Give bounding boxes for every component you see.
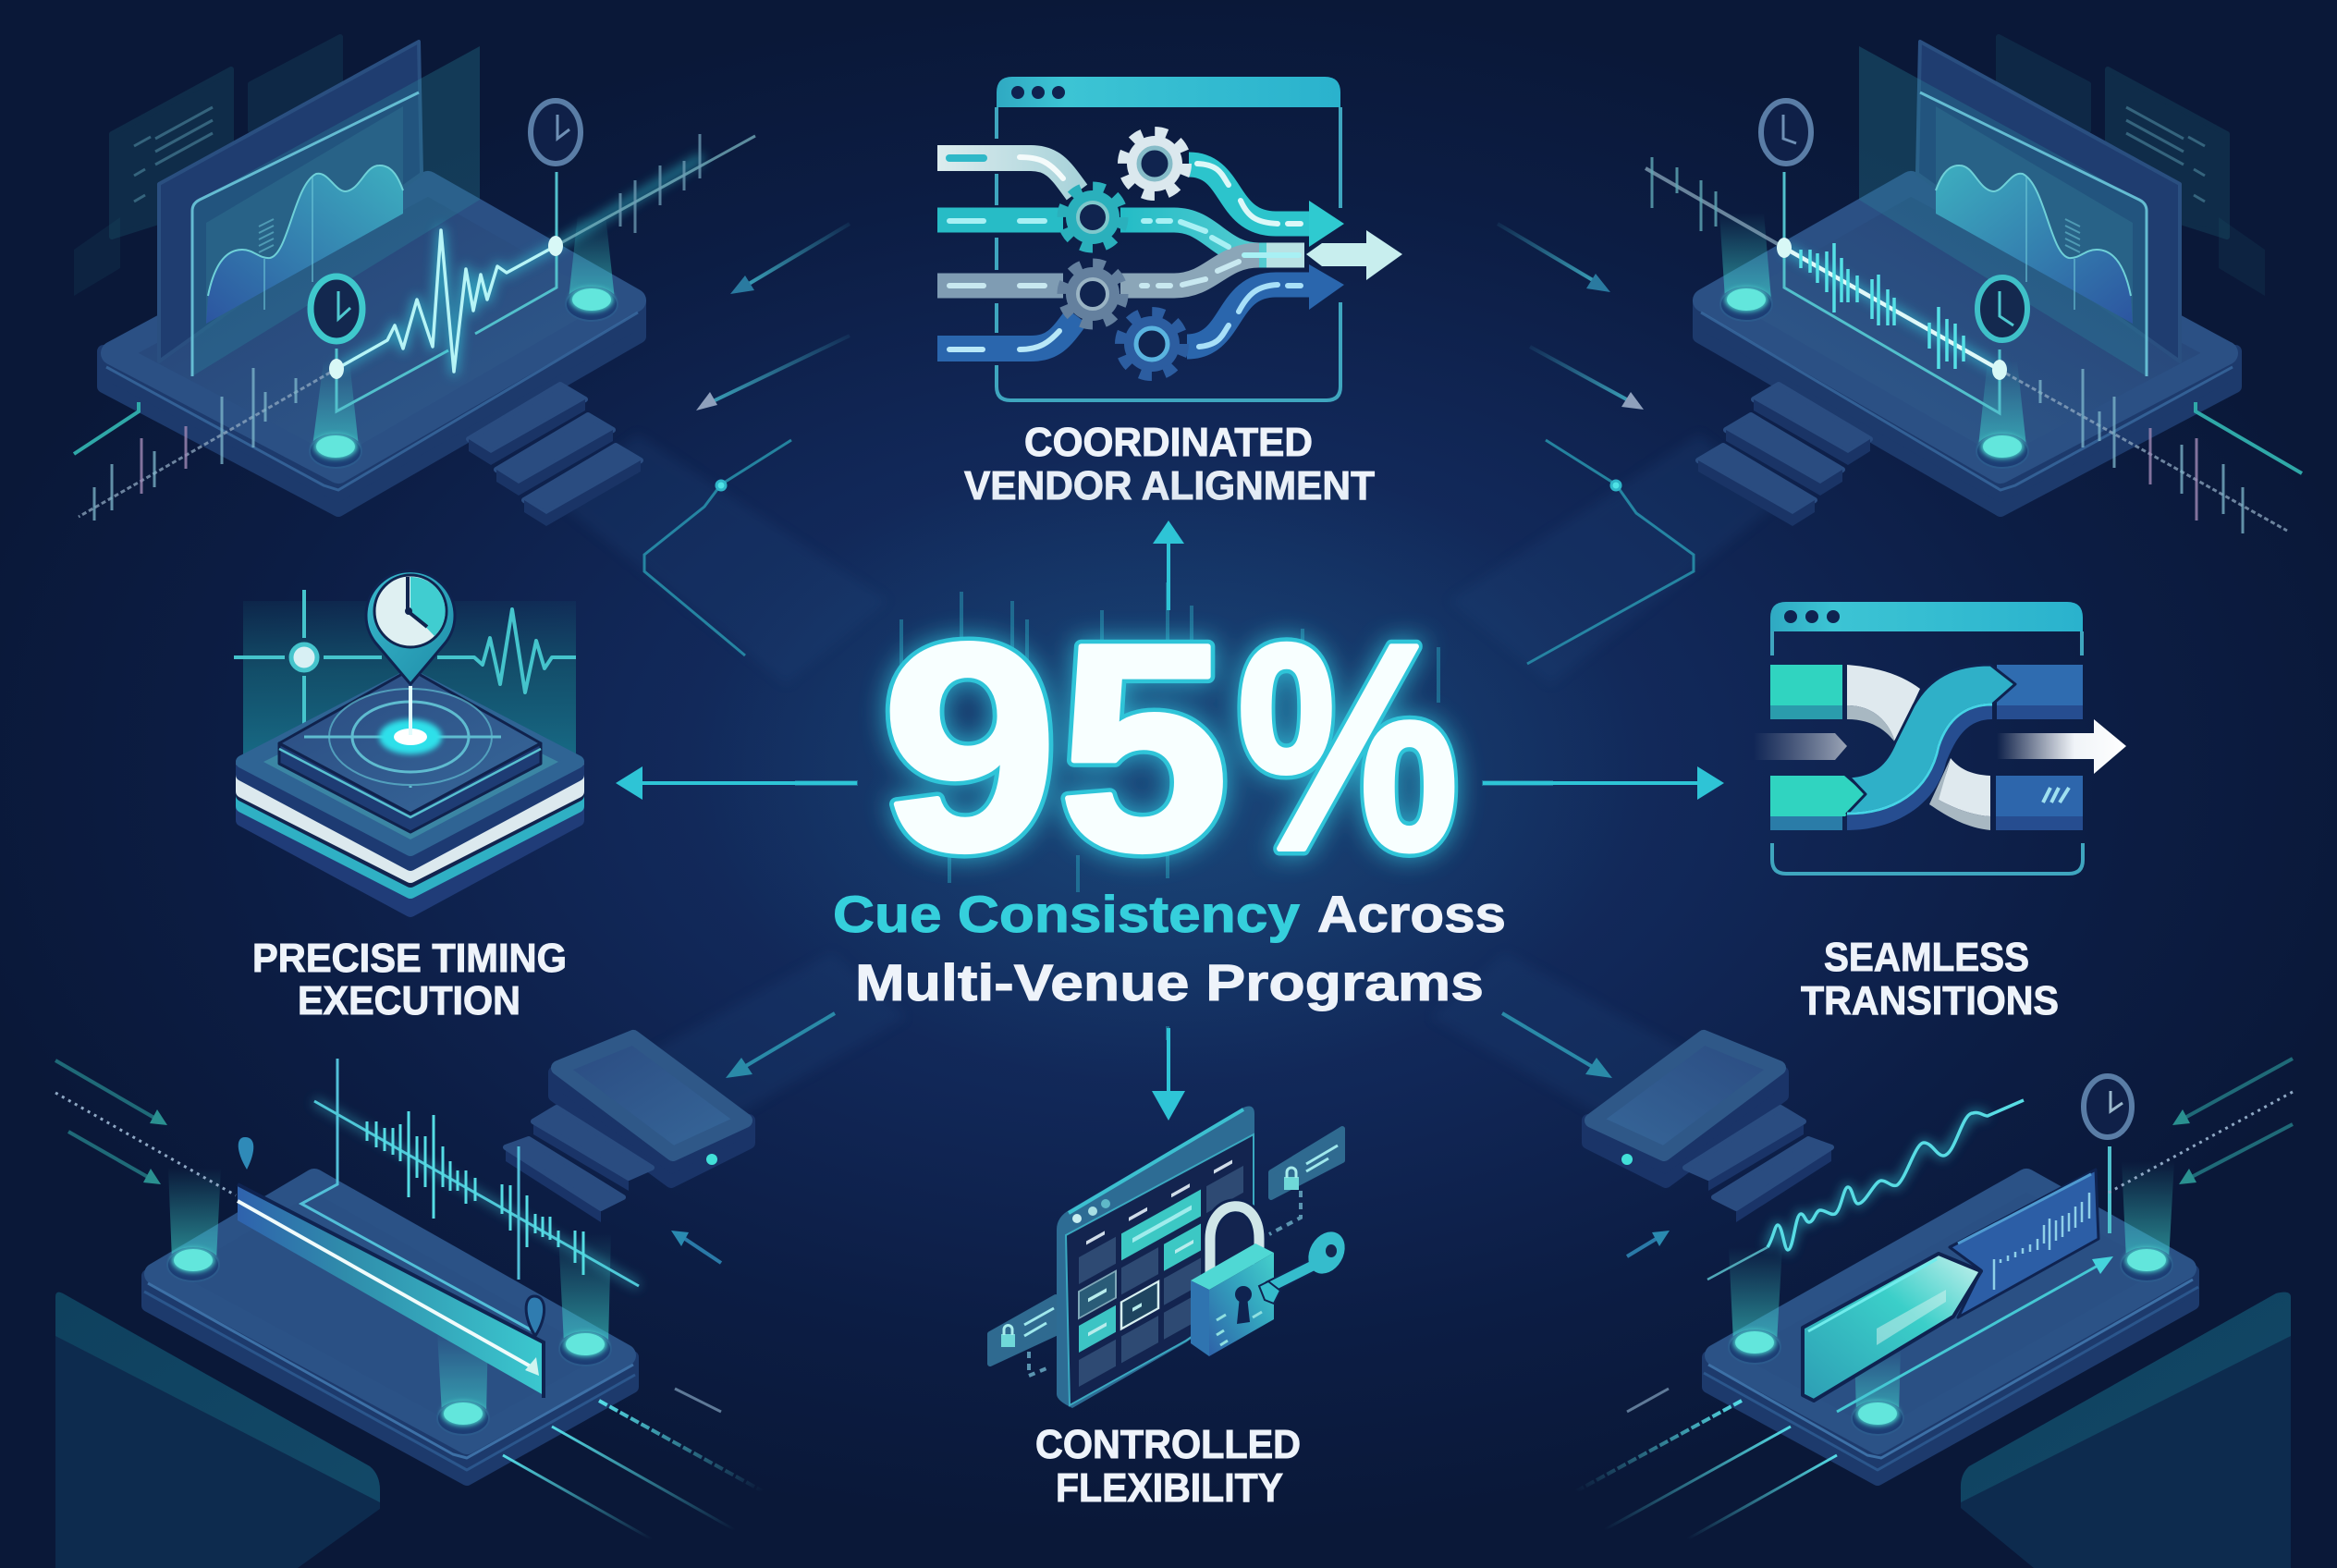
label: [252, 936, 567, 1023]
beams and pods: [1729, 1161, 2174, 1435]
scene: top-left timing platform: [74, 37, 755, 526]
merging roads: [937, 158, 1313, 349]
schedule grid: [1079, 1156, 1243, 1387]
hero stat: 5: [1058, 583, 1229, 912]
incoming arrows and dotted trace: [55, 1060, 763, 1539]
arrow: down to flexibility: [1152, 1028, 1185, 1121]
pulse line: [234, 590, 576, 737]
label: EXECUTION: [298, 978, 520, 1023]
cyan node: [1621, 1154, 1633, 1165]
platform slab: [144, 1180, 635, 1479]
transition blocks: [1770, 665, 2083, 830]
label: [964, 420, 1375, 508]
connector steps: [506, 1037, 749, 1222]
connector bracket: [1784, 172, 2000, 413]
glowing vertical data bars: [795, 582, 1553, 1040]
glass transition arrow: [1803, 1254, 1981, 1401]
scene: bottom-right transition platform: [1576, 1037, 2293, 1539]
incoming arrows and traces: [1576, 1059, 2293, 1539]
cyan trace: [2196, 402, 2302, 473]
beams and pods: [1719, 213, 2028, 468]
large teal panel: bottom left: [55, 1292, 380, 1568]
window frame: [1770, 602, 2083, 874]
hero stat: %: [1237, 583, 1459, 912]
panel: precise timing execution: [234, 571, 578, 1023]
platform slab: [1704, 1180, 2198, 1479]
padlock: [1191, 1207, 1274, 1356]
arrow heads: [1306, 201, 1402, 310]
label: PRECISE TIMING: [252, 936, 567, 981]
label: TRANSITIONS: [1801, 978, 2059, 1023]
rising wave: [1707, 1100, 2024, 1280]
marker pins: [239, 1137, 544, 1336]
teal backdrop: [243, 601, 576, 758]
large teal panel: bottom right: [1961, 1292, 2291, 1568]
subtitle: Multi-Venue Programs: [855, 953, 1484, 1011]
panel: coordinated vendor alignment: [937, 77, 1402, 508]
gears: [1123, 132, 1186, 195]
arrow: left to timing: [616, 766, 857, 800]
hero stat: 9: [882, 583, 1058, 912]
ECG waveform: [79, 134, 755, 521]
clock: front: [1977, 277, 2027, 340]
blue waveform screen: [1950, 1170, 2098, 1317]
circuit line: upper right: [1527, 440, 1694, 664]
panel: seamless transitions: [1754, 602, 2126, 1023]
window frame: [997, 77, 1340, 400]
tick waveform: [1646, 157, 2287, 533]
clock: rear: [531, 101, 581, 164]
direction arrow: [1837, 1256, 2113, 1412]
clock: rear: [1761, 101, 1811, 164]
key: [1259, 1225, 1352, 1304]
arrow: right to transitions: [1483, 766, 1724, 800]
target rings: [304, 686, 501, 788]
label: COORDINATED: [1024, 420, 1313, 465]
centre glow: [688, 453, 1649, 1082]
label: SEAMLESS: [1824, 935, 2029, 980]
cyan node: [706, 1154, 717, 1165]
label: FLEXIBILITY: [1056, 1465, 1283, 1511]
hero stat: 5: [1058, 583, 1229, 912]
hero stat: %: [1237, 583, 1459, 912]
top block: [279, 669, 541, 832]
faint diagonal bands: [555, 435, 1782, 1119]
cyan trace: [74, 402, 139, 454]
diagonal arrows around top scenes: [696, 224, 1644, 410]
subtitle: Cue Consistency: [833, 885, 1300, 943]
connector steps: [1588, 1037, 1831, 1222]
clock: front: [311, 276, 362, 341]
nodes: [1777, 238, 2007, 380]
hero stat: [882, 583, 1459, 912]
glass cue bar: [238, 1184, 544, 1398]
node: [291, 644, 317, 670]
arrow: lower-right diagonal: [1502, 1013, 1612, 1078]
label: CONTROLLED: [1035, 1422, 1301, 1467]
arrow: up to vendor alignment: [1153, 521, 1184, 610]
subtitle: Across: [1317, 885, 1506, 943]
S-curve arrow: [1847, 665, 2015, 830]
label cards: [990, 1129, 1342, 1376]
hero stat: 9: [882, 583, 1058, 912]
flow arrows: [1754, 719, 2126, 802]
panel: controlled flexibility: [990, 1107, 1352, 1511]
nodes: [329, 236, 563, 379]
label: [1035, 1422, 1301, 1511]
scene: bottom-left cue bar platform: [55, 1037, 763, 1539]
hero stat: 5: [1058, 583, 1229, 912]
label: [1801, 935, 2059, 1023]
hero stat: 9: [882, 583, 1058, 912]
hero stat: %: [1237, 583, 1459, 912]
road dashes: [949, 157, 1301, 349]
clock on stem: [2084, 1076, 2132, 1233]
connector brackets: [336, 172, 557, 411]
arrow: lower-left diagonal: [726, 1013, 835, 1078]
circuit line: upper left: [644, 440, 791, 655]
isometric window: [1057, 1107, 1254, 1408]
scene: top-right timing platform: [1646, 37, 2302, 533]
stacked platform layers: [242, 675, 578, 911]
wave and vertical guides: [301, 1059, 639, 1332]
beams and pods: [167, 1168, 611, 1435]
label: VENDOR ALIGNMENT: [964, 463, 1375, 508]
subtitle: [833, 885, 1506, 1011]
location pin with clock: [366, 571, 455, 684]
beams and pods: [310, 214, 618, 468]
